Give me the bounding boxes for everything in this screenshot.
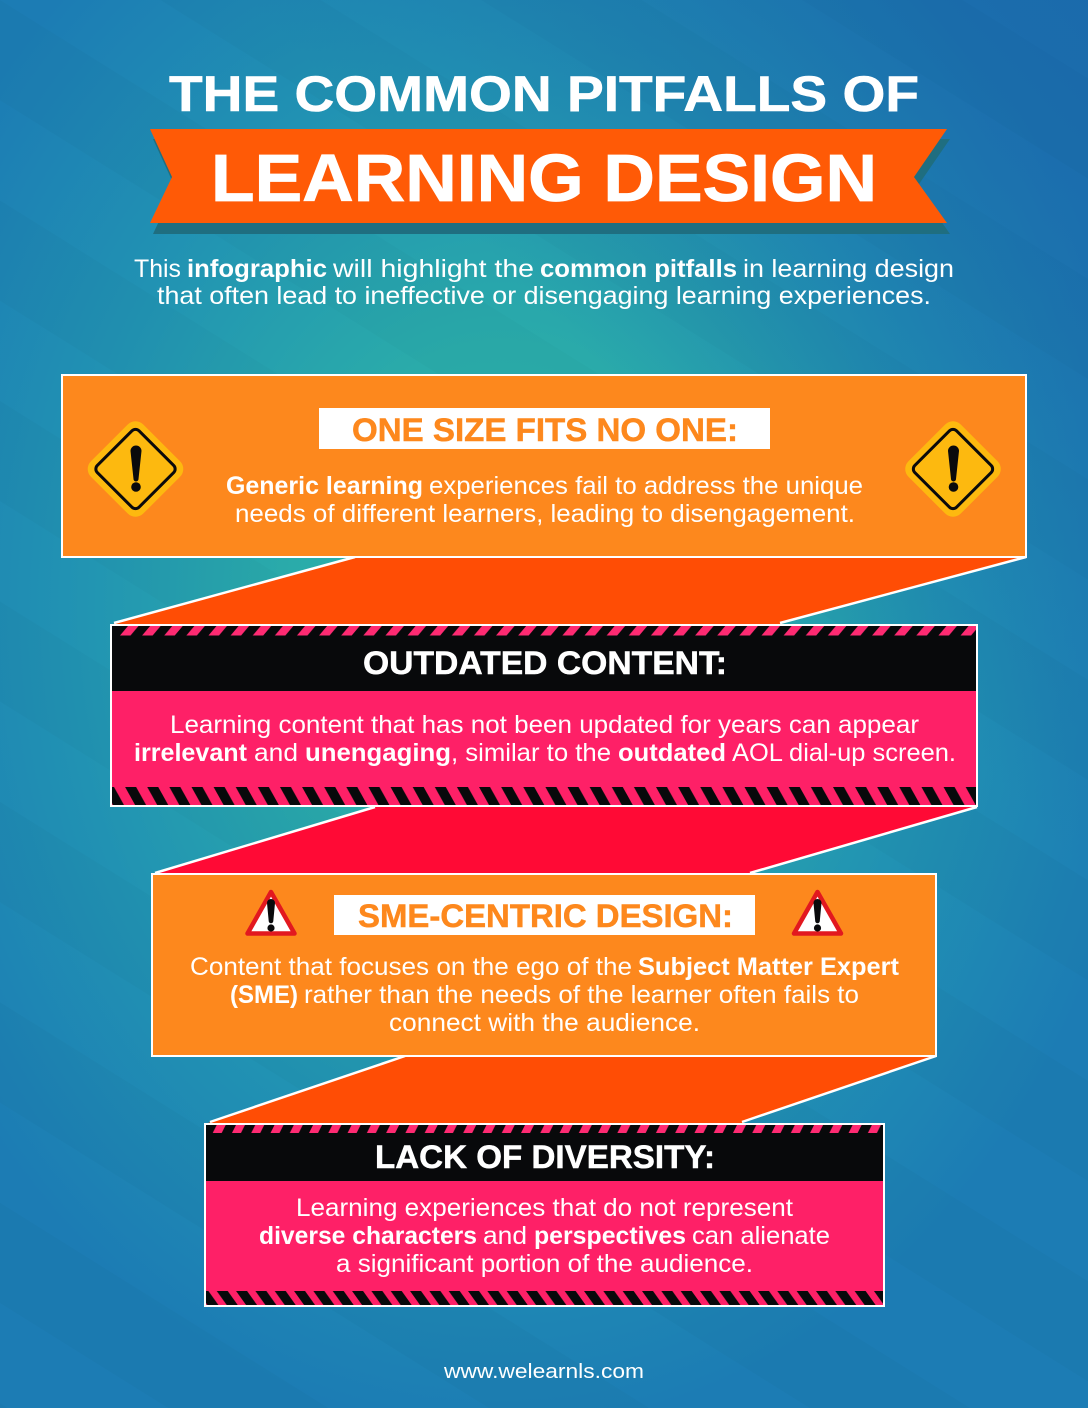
ribbon connector 3 [208, 1056, 936, 1123]
hazard stripes top [213, 1125, 881, 1133]
title: first line: THE COMMON PITFALLS OF [169, 66, 919, 122]
panel background [152, 874, 936, 1056]
body text: AOL dial-up screen. [732, 739, 956, 767]
body text: Generic learning [226, 472, 423, 500]
panel: one size fits no one [62, 375, 1026, 557]
panel: sme-centric design [152, 874, 936, 1056]
body text: connect with the audience. [389, 1009, 700, 1037]
body text: Learning experiences that do not represent [296, 1194, 793, 1222]
banner shadow [153, 139, 950, 234]
header bar [112, 626, 976, 691]
title banner [150, 129, 950, 234]
icon: warning diamond right [901, 417, 1005, 521]
panel: lack of diversity [205, 1124, 884, 1306]
heading: lack of diversity: LACK OF DIVERSITY: [375, 1139, 715, 1175]
body text [226, 472, 863, 528]
ribbon connector 1 [113, 557, 1026, 624]
banner ribbon [150, 129, 947, 223]
intro text: This [134, 255, 181, 283]
body text: a significant portion of the audience. [336, 1250, 753, 1278]
hazard stripes bottom [206, 1291, 883, 1305]
intro text: common pitfalls [540, 255, 737, 283]
body text: can alienate [692, 1222, 830, 1250]
body text [190, 953, 900, 1037]
panel frame [205, 1124, 884, 1306]
hazard stripes top [120, 626, 976, 636]
body text [259, 1194, 830, 1278]
banner heading: LEARNING DESIGN [211, 141, 877, 216]
panel: outdated content [111, 625, 977, 806]
icon: warning diamond left [83, 417, 188, 521]
heading: outdated content: OUTDATED CONTENT: [363, 645, 727, 681]
panel frame [111, 625, 977, 806]
body text: diverse characters [259, 1222, 477, 1250]
body text: irrelevant [134, 739, 248, 767]
hazard stripes bottom [112, 787, 976, 805]
body text: and [254, 739, 298, 767]
intro text: infographic [187, 255, 327, 283]
body text: experiences fail to address the unique [429, 472, 863, 500]
icon: warning triangle left [248, 892, 294, 934]
body text: Content that focuses on the ego of the [190, 953, 632, 981]
body text: unengaging [305, 739, 451, 767]
footer url: www.welearnls.com [443, 1361, 644, 1383]
body text: rather than the needs of the learner often fails to [304, 981, 859, 1009]
body text: (SME) [230, 981, 298, 1009]
intro text: in learning design [743, 255, 954, 283]
body text: Subject Matter Expert [638, 953, 900, 981]
body text: outdated [618, 739, 726, 767]
body text [134, 711, 956, 767]
ribbon connector 2 [155, 807, 977, 874]
heading: sme-centric design: SME-CENTRIC DESIGN: [358, 898, 733, 934]
intro text: that often lead to ineffective or disengaging learning experiences. [157, 282, 931, 310]
body text: perspectives [534, 1222, 686, 1250]
body fill [206, 1181, 883, 1305]
body text: and [483, 1222, 527, 1250]
intro text: will highlight the [332, 255, 534, 283]
intro text [134, 255, 954, 310]
body text: , similar to the [451, 739, 611, 767]
panel background [62, 375, 1026, 557]
icon: warning triangle right [794, 892, 841, 934]
header bar [206, 1125, 883, 1181]
body fill [112, 691, 976, 805]
heading: one size fits no one: ONE SIZE FITS NO ONE: [352, 412, 738, 448]
body text: Learning content that has not been updated for years can appear [170, 711, 919, 739]
body text: needs of different learners, leading to disengagement. [235, 500, 855, 528]
